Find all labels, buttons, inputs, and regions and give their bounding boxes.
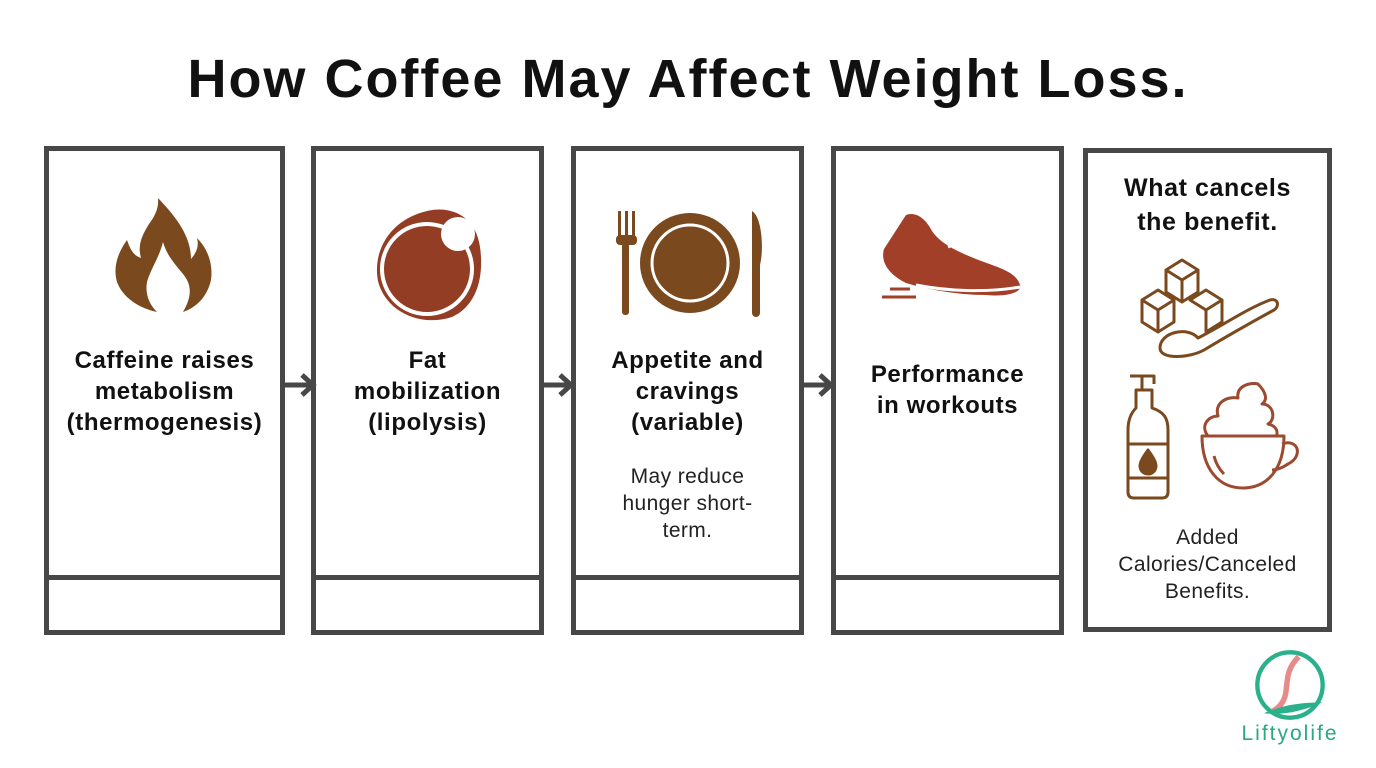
label <box>611 347 764 436</box>
note: May reduce <box>631 465 744 488</box>
icon: syrup bottle <box>1126 374 1170 500</box>
heading: What cancels <box>1124 174 1291 202</box>
panel: thermogenesis <box>44 146 285 635</box>
icon: plate and cutlery <box>616 211 762 317</box>
label <box>871 361 1024 419</box>
heading: the benefit. <box>1137 208 1278 236</box>
label: in workouts <box>877 392 1018 419</box>
icon: whipped cream cup <box>1200 382 1299 490</box>
icon: fat cell <box>376 210 482 320</box>
note <box>622 465 753 542</box>
arrow 2 <box>544 373 571 397</box>
label: (lipolysis) <box>368 409 487 436</box>
logo: Liftyolife: Liftyolife <box>1241 722 1339 745</box>
caption: Added <box>1176 526 1239 549</box>
label: (variable) <box>631 409 744 436</box>
logo: Liftyolife <box>1241 650 1339 745</box>
caption: Calories/Canceled <box>1118 553 1297 576</box>
panel: lipolysis <box>311 146 544 635</box>
label: Appetite and cravings <box>611 347 764 405</box>
panel: workouts <box>831 146 1064 635</box>
label: Fat <box>409 347 446 374</box>
arrow 3 <box>804 373 831 397</box>
arrow 1 <box>285 373 317 397</box>
icon: shoe <box>882 214 1020 298</box>
label: Caffeine raises metabolism (thermogenesis) <box>67 347 262 436</box>
label <box>354 347 501 436</box>
heading <box>1124 174 1291 236</box>
caption <box>1118 526 1297 603</box>
panel: appetite <box>571 146 804 635</box>
panel: what cancels the benefit <box>1083 148 1332 632</box>
icons: sugar cubes and spoon <box>1140 258 1279 358</box>
caption: Benefits. <box>1165 580 1250 603</box>
label: mobilization <box>354 378 501 405</box>
label: Performance <box>871 361 1024 388</box>
note: hunger short- <box>622 492 753 515</box>
title: How Coffee May Affect Weight Loss. <box>187 49 1189 109</box>
note: term. <box>663 519 712 542</box>
icon: flame <box>115 198 212 312</box>
